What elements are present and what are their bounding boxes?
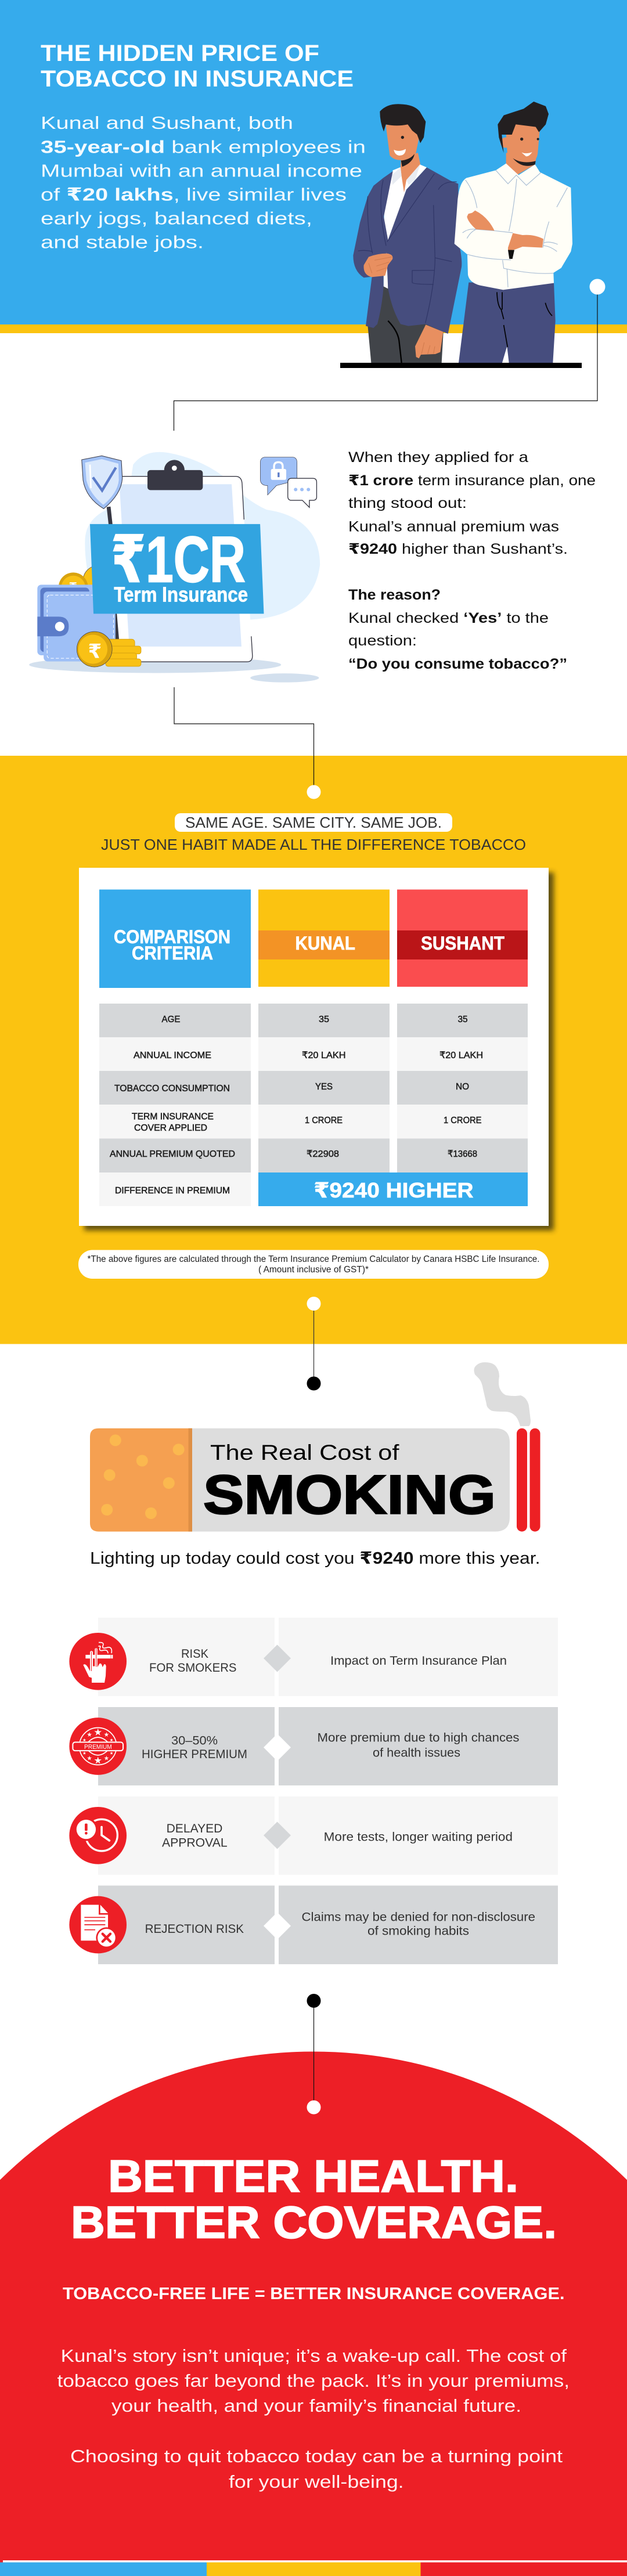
left man head [386,118,420,160]
intro text: early jogs, balanced diets, [41,208,312,229]
right man head [506,118,540,164]
icon: premium stamp [69,1718,127,1775]
closing subheading: TOBACCO-FREE LIFE = BETTER INSURANCE COVERAGE. [63,2285,564,2303]
row: higher premium: More premium due to high chances [317,1731,519,1745]
right man shirt [455,164,572,290]
header: Sushant [397,889,528,987]
row: difference in premium [99,1172,528,1206]
panel: hero [0,0,627,368]
text: the application story: question: [348,633,417,649]
panel: closing message [0,1994,627,2560]
coins behind wallet: ₹ [69,580,77,594]
header: Kunal: KUNAL [295,933,355,954]
row: delayed approval: DELAYED [167,1822,222,1835]
panel: comparison [0,687,627,1344]
row: annual income: ₹20 LAKH [302,1051,346,1060]
right man trousers [459,283,556,363]
closing paragraph: Choosing to quit tobacco today can be a turning point [70,2446,563,2466]
connector: risk table to closing [307,1994,320,2114]
row: rejection risk: REJECTION RISK [145,1922,244,1936]
row: higher premium: HIGHER PREMIUM [142,1748,247,1761]
closing heading: BETTER HEALTH. [108,2151,518,2202]
row: term insurance cover: 1 CRORE [444,1116,482,1125]
base bar [340,363,582,368]
cigarette body [192,1428,510,1532]
row: higher premium: of health issues [373,1747,460,1760]
clipboard [109,460,253,662]
heading line: JUST ONE HABIT MADE ALL THE DIFFERENCE TOBACCO [101,836,526,853]
icon: clock with alert [69,1807,127,1864]
row: delayed approval: APPROVAL [162,1837,228,1849]
text: the application story: The reason? [348,587,441,603]
row: tobacco consumption: YES [315,1082,333,1092]
left man shirt and neck [384,164,427,288]
front coin [77,632,112,667]
banner: cigarette heading: SMOKING [203,1464,496,1526]
row: risk for smokers: FOR SMOKERS [149,1661,237,1675]
row: age: AGE [161,1015,180,1024]
shield [82,456,122,508]
intro text: and stable jobs. [41,232,204,252]
closing paragraph: your health, and your family’s financial future. [111,2395,521,2416]
row: higher premium [69,1707,558,1785]
closing heading [71,2151,557,2248]
row: age: 35 [457,1015,468,1024]
icon: rejected document [69,1896,127,1953]
text: the application story [348,449,596,672]
row: rejection risk [69,1885,558,1964]
row: term insurance cover: TERM INSURANCE [132,1112,214,1121]
intro text: Mumbai with an annual income [41,160,362,181]
icon: premium stamp: PREMIUM [84,1744,112,1751]
closing paragraph: for your well-being. [229,2472,404,2492]
row: rejection risk: Claims may be denied for non-disclosure [302,1911,535,1924]
connector: story to comparison [174,687,320,799]
coins behind wallet [59,566,113,602]
text: the application story: “Do you consume tobacco?” [348,656,567,672]
heading pill: SAME AGE. SAME CITY. SAME JOB. [185,814,442,831]
intro text: 35-year-old bank employees in [41,137,366,157]
closing heading: BETTER COVERAGE. [71,2197,557,2248]
banner: ₹1CR term insurance: ₹1CR [111,523,246,596]
row: annual income [99,1037,528,1071]
illustration: two men standing [353,102,572,363]
row: rejection risk: of smoking habits [367,1925,469,1938]
row: annual premium quoted: ANNUAL PREMIUM QUOTED [110,1149,235,1159]
intro text: of ₹20 lakhs , live similar lives [41,185,347,204]
row: annual premium quoted [99,1139,528,1172]
illustration: ₹1 crore clipboard [29,452,320,683]
text: the application story: ₹9240 higher than Sushant’s. [348,541,568,557]
row: annual premium quoted: ₹13668 [448,1149,477,1159]
speech bubbles [260,457,316,507]
banner: ₹1CR term insurance [90,523,264,614]
comparison table card [79,868,554,1231]
text: the application story: Kunal checked ‘Yes’ to the [348,610,549,626]
wallet [37,585,116,662]
banner: ₹1CR term insurance: Term Insurance [114,583,248,606]
panel: risk table [69,1618,558,1964]
row: higher premium: 30–50% [171,1734,218,1748]
text: the application story: ₹1 crore term insurance plan, one [348,472,596,489]
text: the application story: thing stood out: [348,495,467,511]
coin stack [106,639,141,666]
header: Sushant: SUSHANT [421,933,505,954]
row: age: 35 [319,1015,329,1024]
connector: comparison to smoking [307,1297,320,1391]
blob backdrop [85,452,320,620]
closing paragraph [57,2346,570,2492]
header: comparison criteria: CRITERIA [132,943,213,964]
smoke [474,1362,531,1426]
title: THE HIDDEN PRICE OF [41,41,319,66]
text: the application story: Kunal’s annual premium was [348,519,559,535]
footnote pill [78,1250,549,1279]
row: difference in premium: DIFFERENCE IN PREMIUM [115,1186,230,1196]
footnote pill: ( Amount inclusive of GST)* [258,1265,369,1275]
left man jacket [353,167,462,334]
row: term insurance cover: 1 CRORE [305,1116,343,1125]
row: delayed approval [69,1796,558,1875]
row: delayed approval: More tests, longer waiting period [324,1831,513,1844]
header: Kunal [258,889,390,987]
row: annual income: ₹20 LAKH [439,1051,483,1060]
footnote pill: *The above figures are calculated through the Term Insurance Premium Calculator by Canara HSBC Life Insurance. [87,1254,540,1264]
intro text: Kunal and Sushant, both [41,113,293,133]
cigarette filter [90,1428,192,1532]
row: term insurance cover: COVER APPLIED [134,1123,207,1133]
row: difference in premium: ₹9240 HIGHER [314,1178,474,1202]
row: tobacco consumption: TOBACCO CONSUMPTION [114,1084,230,1094]
row: tobacco consumption [99,1071,528,1105]
closing paragraph: Kunal’s story isn’t unique; it’s a wake-up call. The cost of [61,2346,567,2366]
row: age [99,1004,528,1037]
icon: hand holding cigarette [69,1633,127,1690]
banner: cigarette heading [90,1362,540,1532]
header: comparison criteria: COMPARISON [114,926,230,947]
front coin: ₹ [88,640,102,662]
row: annual income: ANNUAL INCOME [134,1051,211,1060]
title: TOBACCO IN INSURANCE [41,66,354,92]
row: term insurance cover [99,1105,528,1139]
left man hands [363,254,392,277]
title [41,41,354,92]
heading text: The Real Cost of [210,1441,399,1464]
row: annual premium quoted: ₹22908 [307,1149,339,1159]
row: risk for smokers: Impact on Term Insurance Plan [330,1654,507,1668]
connector: hero to term insurance [174,279,605,431]
right man arms [467,211,495,230]
header: comparison criteria [99,889,251,988]
closing paragraph: tobacco goes far beyond the pack. It’s in your premiums, [57,2371,570,2391]
row: risk for smokers: RISK [181,1647,208,1661]
intro text [41,113,366,252]
row: tobacco consumption: NO [456,1082,469,1092]
subheading: Lighting up today could cost you ₹9240 more this year. [90,1549,540,1568]
right man neck [506,153,537,175]
red bars [517,1428,540,1532]
text: the application story: When they applied for a [348,449,528,466]
row: risk for smokers [69,1618,558,1696]
left man trousers [367,277,444,363]
footer colour band [0,2560,627,2576]
ground shadows [29,656,281,673]
